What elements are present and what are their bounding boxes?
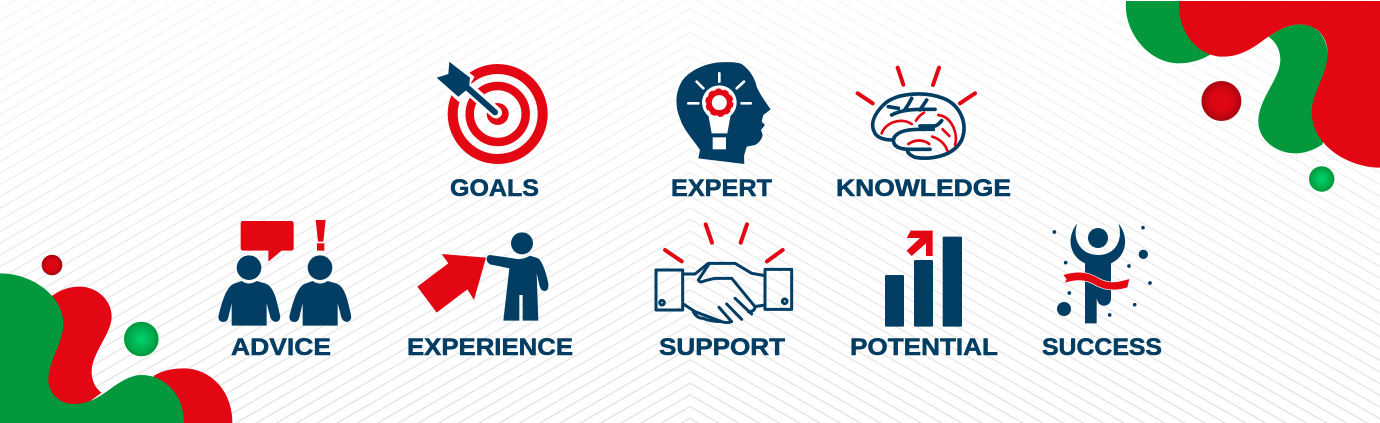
decoration: bottom left green dot — [124, 322, 159, 356]
icon: target with arrow — [437, 62, 543, 159]
label: potential: POTENTIAL — [850, 334, 998, 361]
panel: expert — [671, 62, 772, 202]
panel: experience — [407, 232, 573, 361]
label: advice: ADVICE — [231, 334, 331, 361]
label: experience: EXPERIENCE — [407, 334, 573, 361]
panel: goals — [437, 62, 543, 202]
label: support: SUPPORT — [659, 334, 785, 361]
icon: runner crossing finish ribbon — [1052, 223, 1152, 323]
label: goals: GOALS — [450, 175, 539, 202]
icon: handshake with rays — [656, 224, 792, 322]
icon: two people with speech bubble and exclamation — [218, 220, 351, 326]
icon: person pointing with red arrow — [417, 232, 548, 321]
panel: potential — [850, 231, 998, 361]
label: expert: EXPERT — [671, 175, 772, 202]
decoration: top right blobs — [1126, 1, 1380, 168]
panel: knowledge — [836, 68, 1011, 202]
panel: success — [1042, 223, 1162, 361]
panel: support — [656, 224, 792, 361]
decoration: bottom left blobs — [0, 273, 232, 423]
panel: advice — [218, 220, 351, 361]
decoration: top right green dot — [1309, 166, 1334, 192]
label: knowledge: KNOWLEDGE — [836, 175, 1011, 202]
decoration: top right red dot — [1201, 81, 1241, 121]
icon: brain with rays — [858, 68, 975, 158]
icon: head with light bulb and gear — [676, 62, 771, 164]
icon: rising bars with arrow — [885, 231, 962, 327]
label: success: SUCCESS — [1042, 334, 1162, 361]
decoration: bottom left red dot — [42, 255, 62, 275]
